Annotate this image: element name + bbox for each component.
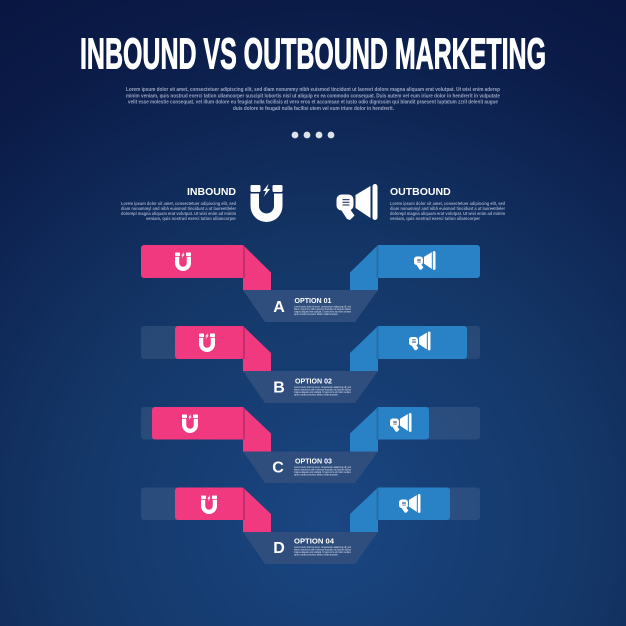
- blue ribbon B: [378, 326, 467, 359]
- option 02 text: diam nonummy nibh euismod tincidunt ut laoreet dolore: [294, 388, 352, 392]
- pink ribbon A: [141, 245, 243, 278]
- option 04 text: Lorem ipsum dolor sit amet, consectetuer adipiscing elit, sed: [294, 546, 352, 549]
- icon: large magnet: [250, 184, 282, 222]
- outbound header: dolorepl magna aliquam erat volutpat. Ut wisi enim ad minim: [390, 211, 505, 216]
- magnet icon B: [199, 333, 215, 352]
- left track B: [141, 326, 243, 359]
- pagination dots: [292, 132, 334, 138]
- intro text block: duis dolore te feugait nulla facilisi utem vel eum iriure dolor in hendrerit.: [233, 106, 394, 112]
- megaphone icon A: [414, 251, 435, 270]
- intro text block: velit esse molestie consequat, vel illum dolore eu feugiat nulla facilisis at vero eros et accumsan et iusto odio dignissim qui blandit praesent luptatum zzril delenit augue: [128, 100, 498, 106]
- option 03 text: diam nonummy nibh euismod tincidunt ut laoreet dolore: [294, 468, 352, 472]
- option 04 text: [294, 536, 352, 556]
- outbound header: Lorem ipsum dolor sit amet, consectetuer adipiscing elit, sed: [390, 201, 505, 206]
- option panel C: [243, 452, 378, 483]
- blue ribbon A: [378, 245, 480, 278]
- option panel D: [243, 532, 378, 564]
- megaphone icon C: [390, 413, 411, 432]
- option 04 text: diam nonummy nibh euismod tincidunt ut laoreet dolore: [294, 548, 352, 552]
- magnet icon D: [201, 495, 217, 514]
- inbound header: INBOUND: [187, 186, 236, 198]
- row D: [141, 488, 480, 564]
- megaphone icon B: [409, 332, 430, 350]
- pink fold D: [243, 488, 271, 532]
- option 02 text: quis nostrud exerci tation ullamcorper: [294, 394, 338, 396]
- option 01 text: OPTION 01: [294, 296, 332, 305]
- option 04 text: quis nostrud exerci tation ullamcorper: [294, 554, 338, 556]
- option 01 text: diam nonummy nibh euismod tincidunt ut laoreet dolore: [294, 308, 352, 311]
- outbound header: OUTBOUND: [390, 186, 451, 198]
- option 04 text: OPTION 04: [294, 536, 335, 546]
- pink fold C: [243, 407, 271, 452]
- right track D: [378, 488, 480, 520]
- option 02 text: Lorem ipsum dolor sit amet, consectetuer adipiscing elit, sed: [294, 386, 352, 389]
- left track D: [141, 488, 243, 520]
- option 01 text: [294, 296, 352, 316]
- megaphone icon D: [399, 494, 420, 513]
- option panel B: [243, 371, 378, 403]
- blue ribbon D: [378, 488, 450, 520]
- magnet icon A: [175, 252, 191, 271]
- option 03 text: [294, 456, 352, 476]
- row B: [141, 326, 480, 403]
- blue ribbon C: [378, 407, 429, 440]
- option 03 text: OPTION 03: [295, 456, 332, 466]
- outbound header: [390, 186, 505, 221]
- option 03 text: magna aliquam erat volutpat. Ut wisi enim ad minim veniam: [294, 471, 351, 474]
- blue fold A: [350, 245, 378, 290]
- letter C: C: [272, 460, 284, 476]
- pink fold B: [243, 326, 271, 371]
- option 02 text: magna aliquam erat volutpat. Ut wisi enim ad minim veniam: [294, 391, 351, 394]
- letter A: A: [273, 299, 285, 316]
- intro text block: minim veniam, quis nostrud exerci tation ullamcorper suscipit lobortis nisl ut aliquip ex ea commodo consequat. Duis autem vel eum iriure dolor in hendrerit in vulputate: [126, 93, 500, 99]
- pink fold A: [243, 245, 271, 290]
- intro text block: Lorem ipsum dolor sit amet, consectetuer adipiscing elit, sed diam nonummy nibh euismod tincidunt ut laoreet dolore magna aliquam erat volutpat. Ut wisi enim adersp: [126, 87, 501, 93]
- inbound header: diam nonummyl and nibh euismod tincidunt a ut laoreetdeler: [121, 206, 236, 211]
- row A: [141, 245, 480, 322]
- option 01 text: magna aliquam erat volutpat. Ut wisi enim ad minim veniam: [294, 310, 351, 314]
- inbound header: veniam, quis nostrud exerci tation ullamcorper: [146, 216, 236, 221]
- outbound header: diam nonummyl and nibh euismod tincidunt a ut laoreetdeler: [390, 206, 505, 211]
- pink ribbon C: [152, 407, 243, 440]
- magnet icon C: [182, 414, 198, 433]
- option 04 text: magna aliquam erat volutpat. Ut wisi enim ad minim veniam: [294, 551, 351, 554]
- letter D: D: [273, 540, 285, 557]
- inbound header: dolorepl magna aliquam erat volutpat. Ut wisi enim ad minim: [121, 211, 236, 216]
- icon: large megaphone: [336, 184, 378, 220]
- letter B: B: [273, 380, 285, 396]
- pink ribbon B: [175, 326, 243, 359]
- left track C: [141, 407, 243, 440]
- row C: [141, 407, 480, 483]
- inbound header: Lorem ipsum dolor sit amet, consectetuer adipiscing elit, sed: [121, 201, 236, 206]
- option 02 text: [294, 376, 352, 396]
- option 03 text: Lorem ipsum dolor sit amet, consectetuer adipiscing elit, sed: [294, 466, 352, 469]
- inbound header: [121, 186, 236, 221]
- option 01 text: Lorem ipsum dolor sit amet, consectetuer adipiscing elit, sed: [294, 306, 352, 308]
- right track C: [378, 407, 480, 440]
- right track B: [378, 326, 480, 359]
- blue fold C: [350, 407, 378, 452]
- blue fold D: [350, 488, 378, 532]
- option 02 text: OPTION 02: [295, 376, 332, 386]
- option 01 text: quis nostrud exerci tation ullamcorper: [294, 313, 338, 316]
- intro text block: [126, 87, 501, 112]
- outbound header: veniam, quis nostrud exerci tation ullamcorper: [390, 216, 480, 221]
- option panel A: [243, 290, 378, 322]
- option 03 text: quis nostrud exerci tation ullamcorper: [294, 474, 338, 476]
- pink ribbon D: [175, 488, 243, 520]
- blue fold B: [350, 326, 378, 371]
